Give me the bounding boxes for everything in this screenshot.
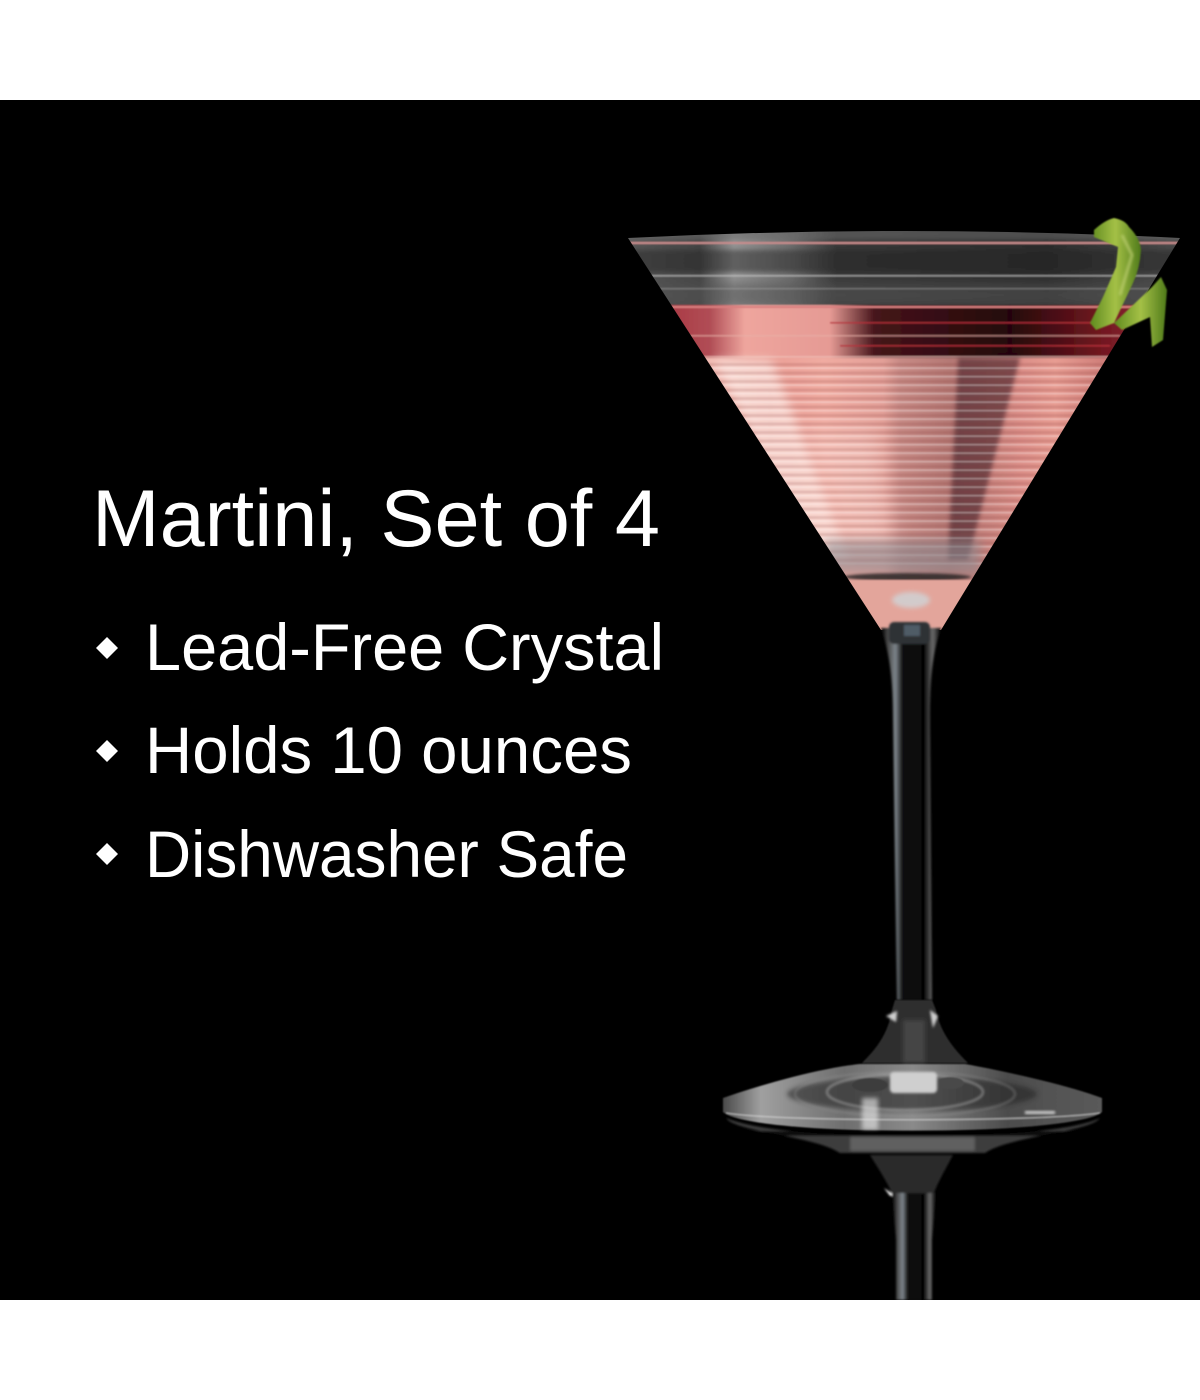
feature: lead-free crystal: Lead-Free Crystal [145,610,664,684]
feature: dishwasher safe: Dishwasher Safe [145,817,628,891]
lime twist garnish [1090,218,1167,347]
reflection of glass on table [726,1118,1100,1300]
feature: holds 10 ounces: Holds 10 ounces [145,713,632,787]
glass bowl with pink cocktail [620,220,1190,635]
martini glass illustration [620,218,1190,1300]
base of glass [723,1000,1102,1131]
feature list [96,610,664,891]
stem [881,622,941,1000]
product title: Martini, Set of 4 [92,474,660,564]
